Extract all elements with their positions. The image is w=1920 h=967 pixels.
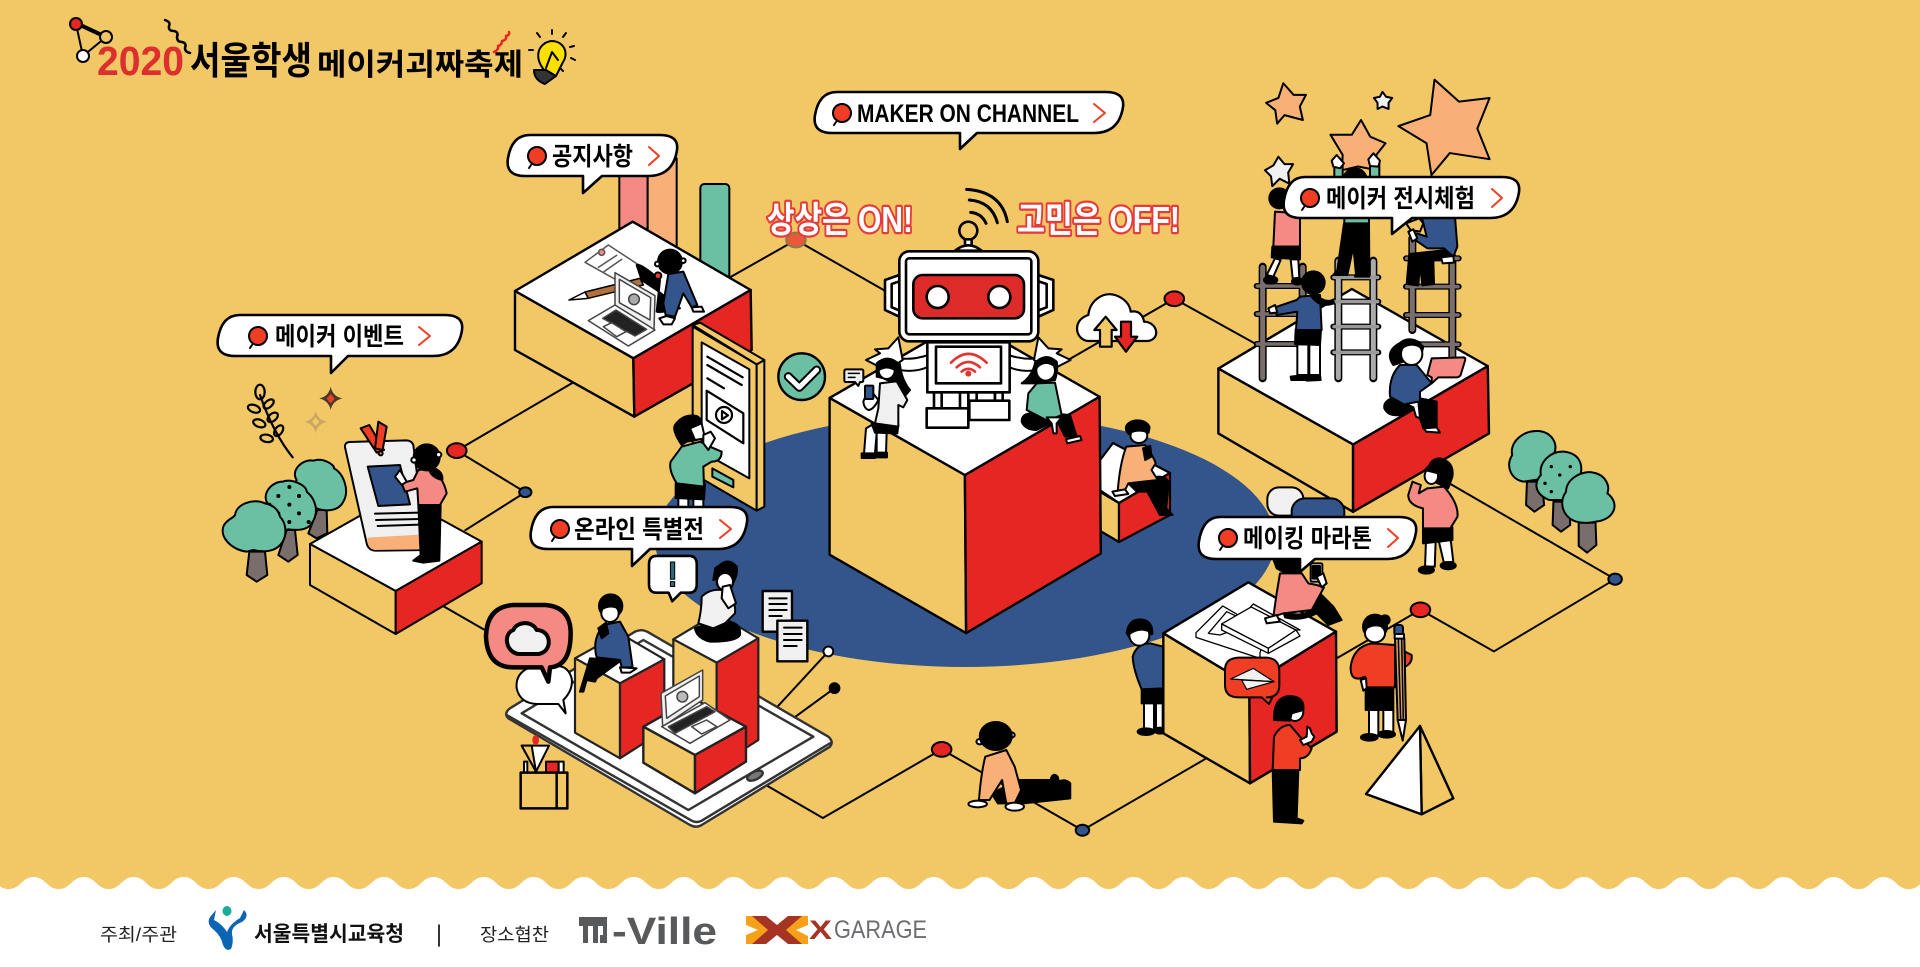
back speech bubbles (1267, 487, 1344, 528)
callout: 공지사항 (508, 135, 677, 193)
person: boy on pedestal (580, 594, 637, 692)
panel: maker exhibition cube (1218, 289, 1489, 512)
title line: 메이커괴짜축제: 메이커괴짜축제 (317, 49, 523, 82)
blue ellipse floor (655, 413, 1275, 667)
headline: 고민은 OFF!: 고민은 OFF! (1017, 199, 1180, 240)
footer (100, 906, 927, 953)
callout: 메이커 전시체험 (1284, 177, 1519, 234)
icon: red bubble with paper plane (1225, 658, 1279, 704)
stars (1265, 80, 1490, 186)
person: navy boy (1127, 619, 1165, 735)
person: seated at notice cube (637, 250, 704, 324)
star: small white (1374, 92, 1392, 109)
panel: standing pink girl and right trees (1408, 431, 1615, 574)
cube: marathon (1163, 582, 1337, 783)
person: pink girl with phone (1265, 559, 1342, 625)
panel: notice cube with bars (515, 158, 764, 511)
robot arms (866, 337, 1071, 371)
star: large (1398, 80, 1490, 175)
icon: white speech bubble (516, 666, 572, 713)
icon: squiggle (165, 20, 190, 53)
title logo (70, 18, 575, 84)
pencil (569, 278, 643, 300)
icon: pink cloud bubble (486, 605, 571, 682)
icon: connected nodes (70, 18, 112, 62)
box: girl pedestal (673, 613, 758, 767)
cube: small seat (1085, 443, 1170, 542)
notice paper (585, 245, 657, 287)
person: girl at card (395, 444, 447, 563)
tree right 2 (1536, 452, 1585, 532)
tree right 3 (1562, 472, 1615, 553)
person: thinking girl on pedestal (695, 573, 740, 642)
device card (345, 422, 427, 551)
star: middle (1330, 120, 1386, 170)
title year: 2020 (97, 38, 184, 84)
icon: document pages (763, 591, 807, 661)
logo: m-Ville: -Ville (612, 911, 717, 953)
callout: 메이킹 마라톤 (1199, 517, 1416, 572)
background: yellow scallop continuation at right edge (1784, 0, 1920, 889)
panel: ladders and climbers (1257, 153, 1465, 433)
callout: 공지사항: 공지사항 (552, 143, 633, 171)
icon: red squiggle (494, 32, 509, 52)
person: teal jacket viewing door (670, 416, 722, 510)
ladder right (1406, 238, 1459, 357)
logo: XGARAGE (746, 915, 927, 945)
tablet (506, 630, 832, 827)
laptop (661, 670, 730, 743)
person: girl head on pedestal (713, 562, 737, 608)
panel: making marathon cube (1127, 487, 1453, 823)
person: climber on mid ladder (1332, 153, 1380, 277)
callout: 온라인 특별전: 온라인 특별전 (574, 516, 704, 544)
icon: cloud upload and download (1077, 294, 1156, 352)
title line: 서울학생: 서울학생 (190, 41, 312, 83)
stacked papers (1196, 604, 1300, 658)
icon: pen cup (521, 735, 567, 808)
person: red shirt boy (1351, 615, 1412, 741)
tree dotted (265, 481, 316, 562)
person: navy climber boy (1268, 271, 1334, 381)
person: pink climber (1264, 188, 1303, 285)
footer label: host: 주최/주관 (100, 925, 177, 945)
callout: MAKER ON CHANNEL: MAKER ON CHANNEL (857, 100, 1079, 128)
callout: 메이커 이벤트: 메이커 이벤트 (275, 323, 404, 351)
panel: tablet with online exhibition (486, 573, 832, 827)
icon: check badge (778, 353, 825, 400)
tree back (294, 460, 346, 538)
person: seated with pink tablet (1384, 339, 1465, 433)
box: laptop pedestal (643, 698, 746, 793)
cube: notice (515, 222, 752, 417)
person: navy climber with star (1406, 217, 1457, 285)
panel: main robot cube (830, 320, 1101, 633)
icon: light bulb (529, 30, 575, 84)
box: boy pedestal (575, 633, 664, 758)
panel: small cube with orange sitter (1085, 420, 1173, 542)
laptop (588, 273, 655, 346)
divider (438, 925, 440, 946)
logo: XGARAGE: X (809, 915, 832, 945)
pyramid (1366, 726, 1453, 814)
person: seated boy in orange (968, 722, 1070, 811)
headline: 상상은 ON!: 상상은 ON! (767, 199, 913, 240)
icon: tan sparkle (304, 411, 327, 433)
icon: dark sparkle (319, 387, 342, 410)
panel: robot with people (844, 189, 1082, 458)
ladder middle (1333, 261, 1378, 378)
icon: exclamation speech bubble (649, 556, 697, 601)
logo text: 서울특별시교육청: 서울특별시교육청 (254, 923, 404, 946)
icon: plant (247, 385, 293, 457)
logo symbol: Seoul education office (209, 906, 247, 950)
person: standing pink girl (1408, 458, 1458, 574)
person: girl in white shirt with phone (862, 359, 910, 458)
connector network lines and nodes (443, 233, 1622, 836)
callout: 메이킹 마라톤: 메이킹 마라톤 (1243, 525, 1372, 553)
cube: event (310, 495, 482, 634)
logo: m-Ville (579, 911, 717, 953)
robot (885, 222, 1053, 428)
callout: MAKER ON CHANNEL (815, 92, 1123, 149)
icon: small chat note (844, 369, 863, 386)
star: small top-left (1266, 83, 1306, 124)
callout: 메이커 이벤트 (218, 315, 462, 373)
panel: maker event cube with trees (223, 385, 482, 634)
callout: 메이커 전시체험: 메이커 전시체험 (1326, 185, 1475, 213)
tree front (223, 501, 285, 582)
logo: XGARAGE: GARAGE (834, 916, 927, 944)
person: red shirt girl (1273, 696, 1314, 823)
person: girl in teal sweater (1022, 357, 1082, 443)
bar chart columns (619, 158, 729, 281)
door panel (693, 323, 764, 511)
wifi arcs (967, 189, 1007, 223)
star: white left (1265, 157, 1293, 186)
callout: 온라인 특별전 (531, 507, 747, 566)
tree right 1 (1509, 431, 1558, 512)
ladder left (1257, 267, 1303, 378)
footer label: venue: 장소협찬 (480, 925, 549, 945)
person: orange sitter (1112, 420, 1173, 515)
